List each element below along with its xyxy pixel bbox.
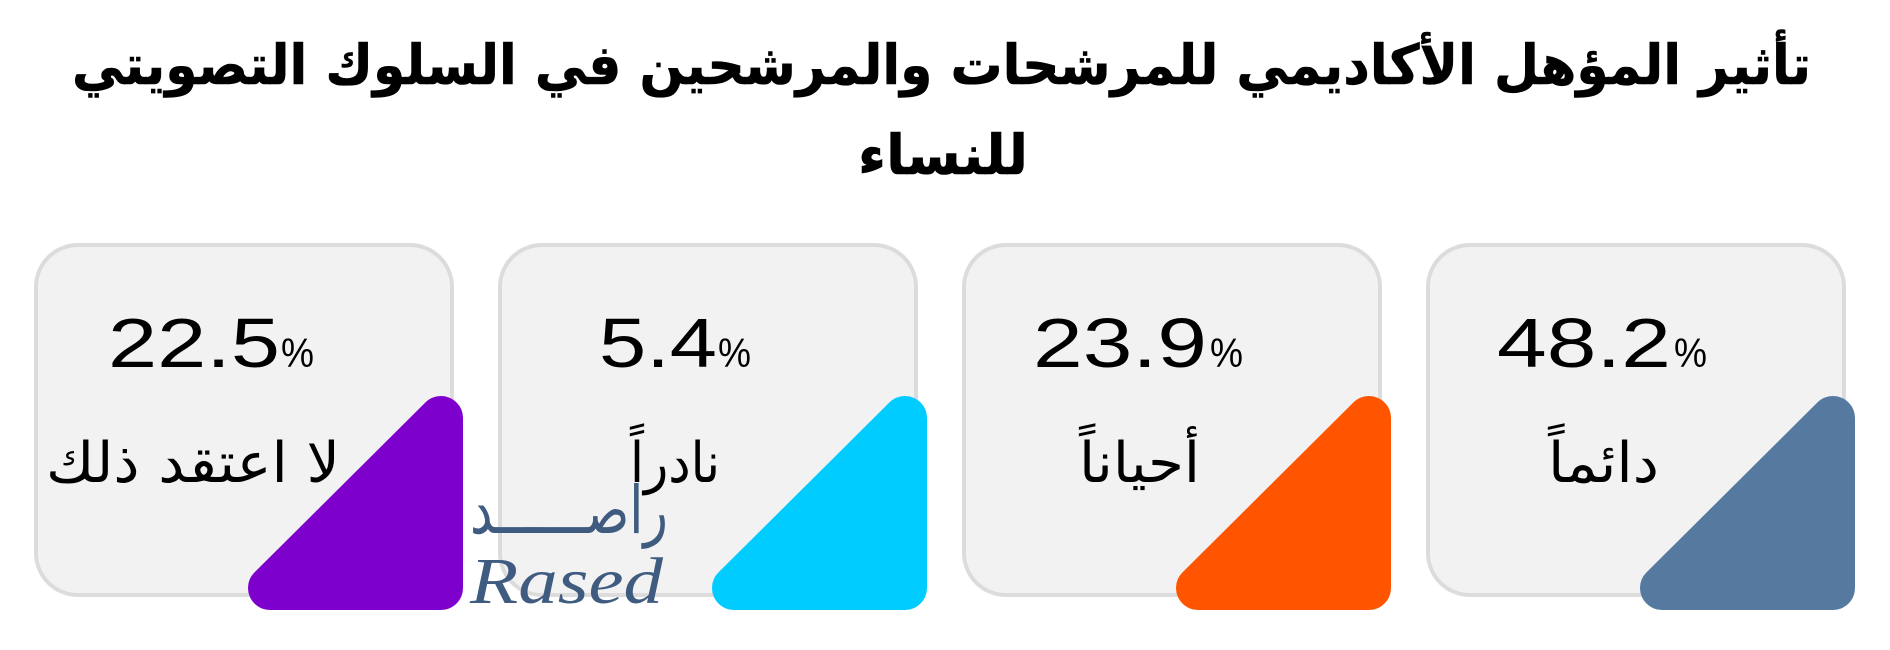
logo: Rased: Rased	[469, 545, 664, 618]
panel: نادراً	[500, 245, 916, 595]
panel: أحياناً	[964, 245, 1380, 595]
value: 22.5%: 22.5	[108, 304, 280, 382]
logo: Rased: راصــــــد	[470, 472, 668, 549]
value: 5.4%: %	[718, 330, 751, 376]
corner triangle: cyan	[734, 418, 905, 588]
title: تأثير المؤهل الأكاديمي للمرشحات والمرشحين في السلوك التصويتي	[72, 29, 1811, 98]
panel: دائماً	[1428, 245, 1844, 595]
title: للنساء	[858, 123, 1028, 187]
label: لا اعتقد ذلك	[46, 431, 340, 496]
value: 22.5%: %	[281, 330, 314, 376]
label: دائماً	[1548, 423, 1659, 496]
value: 48.2%: 48.2	[1497, 304, 1671, 382]
value: 22.5%	[108, 304, 314, 382]
corner triangle: orange	[1198, 418, 1369, 588]
label: أحياناً	[1079, 423, 1200, 496]
title	[72, 29, 1811, 187]
label: نادراً	[630, 423, 720, 496]
corner triangle: purple	[270, 418, 441, 588]
value: 5.4%	[599, 304, 751, 382]
value: 48.2%: %	[1674, 330, 1707, 376]
logo: Rased	[469, 472, 668, 618]
panel: لا أعتقد ذلك	[36, 245, 452, 595]
value: 23.9%: %	[1210, 330, 1243, 376]
value: 48.2%	[1497, 304, 1707, 382]
value: 5.4%: 5.4	[599, 304, 717, 382]
corner triangle: blue	[1662, 418, 1833, 588]
value: 23.9%	[1033, 304, 1243, 382]
value: 23.9%: 23.9	[1033, 304, 1207, 382]
